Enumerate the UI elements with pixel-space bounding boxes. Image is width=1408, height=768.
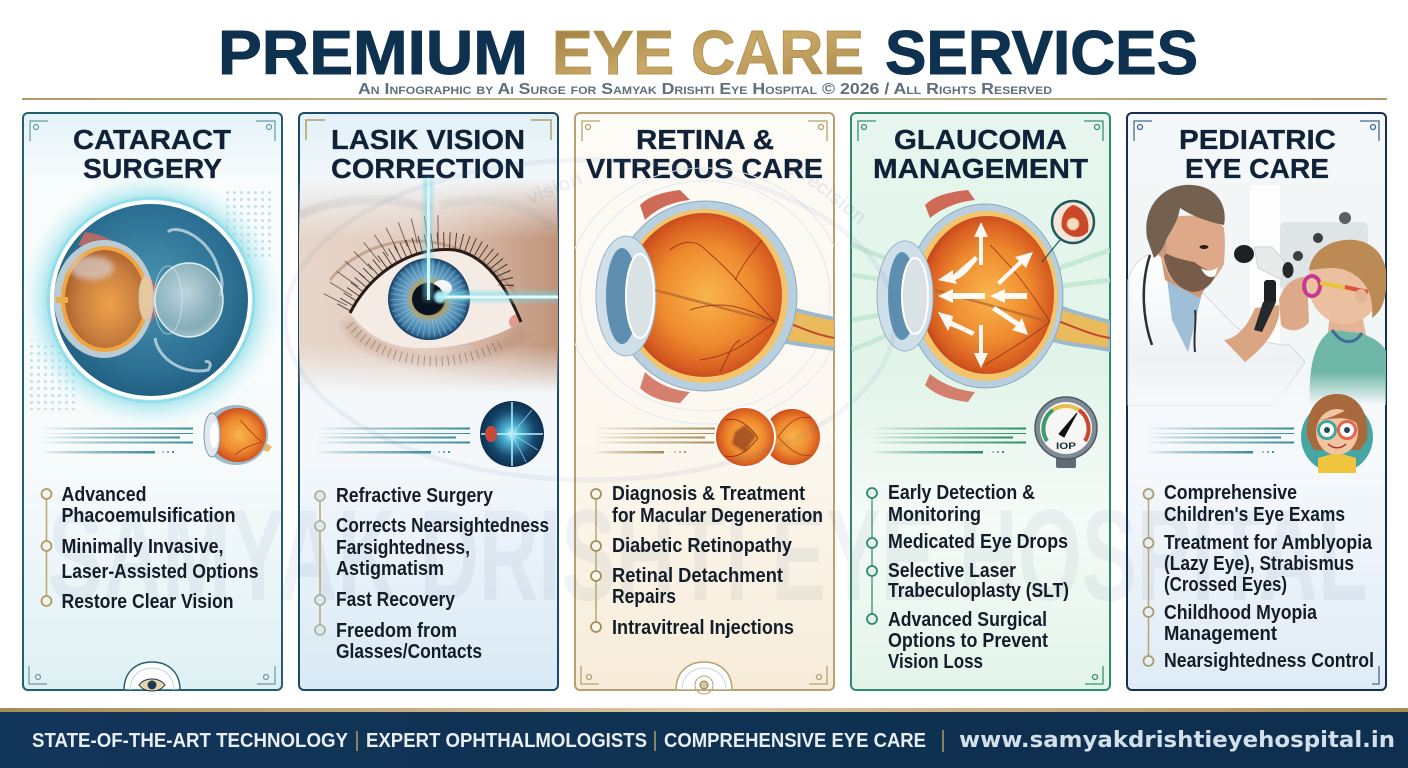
panel: cataract surgery bbox=[21, 113, 282, 691]
list: cataract bullets: Restore Clear Vision bbox=[62, 591, 234, 613]
heading: RETINA & bbox=[636, 124, 774, 155]
icon: IOP gauge: IOP bbox=[1056, 441, 1076, 451]
emblem: eye arch bbox=[124, 662, 180, 691]
list: retina bullets: Repairs bbox=[612, 586, 676, 608]
list: retina bullets bbox=[591, 483, 823, 639]
list: glaucoma bullets: Options to Prevent bbox=[888, 630, 1048, 652]
panel: retina and vitreous care bbox=[565, 113, 845, 694]
list: retina bullets: Intravitreal Injections bbox=[612, 617, 794, 639]
list: glaucoma bullets: Trabeculoplasty (SLT) bbox=[888, 580, 1069, 602]
heading bbox=[1179, 124, 1336, 184]
list: pediatric bullets: Nearsightedness Control bbox=[1164, 650, 1374, 672]
list: pediatric bullets bbox=[1144, 482, 1374, 672]
panel: pediatric eye care bbox=[1127, 113, 1390, 690]
slit lamp instrument bbox=[1234, 245, 1294, 332]
list: glaucoma bullets: Selective Laser bbox=[888, 560, 1016, 582]
heading: PEDIATRIC bbox=[1179, 124, 1336, 155]
list: pediatric bullets: Children's Eye Exams bbox=[1164, 504, 1345, 526]
icon: small eye bbox=[204, 405, 272, 465]
dotted halftone bbox=[30, 190, 275, 410]
list: glaucoma bullets: Advanced Surgical bbox=[888, 609, 1047, 631]
doctor bbox=[1128, 185, 1309, 405]
website url: www.samyakdrishtieyehospital.in bbox=[959, 728, 1395, 753]
list: glaucoma bullets: Monitoring bbox=[888, 504, 981, 526]
title bbox=[218, 19, 1198, 88]
arrows: pressure bbox=[938, 222, 1033, 368]
list: retina bullets: Diabetic Retinopathy bbox=[612, 535, 793, 557]
illustration: eye cross-section with retina bbox=[565, 168, 845, 424]
footer taglines bbox=[32, 730, 926, 752]
list: glaucoma bullets: Vision Loss bbox=[888, 651, 983, 673]
heading bbox=[73, 124, 231, 184]
list: lasik bullets: Farsightedness, bbox=[336, 537, 470, 559]
list: lasik bullets: Refractive Surgery bbox=[336, 485, 494, 507]
illustration: eye with intraocular lens bbox=[21, 172, 281, 428]
decorative lines bbox=[316, 428, 470, 454]
heading: EYE CARE bbox=[1185, 153, 1329, 184]
list: cataract bullets: Laser-Assisted Options bbox=[62, 561, 258, 583]
child bbox=[1304, 240, 1390, 405]
list: glaucoma bullets bbox=[867, 482, 1069, 673]
list: lasik bullets: Glasses/Contacts bbox=[336, 641, 482, 663]
list: lasik bullets: Fast Recovery bbox=[336, 589, 456, 611]
heading: CATARACT bbox=[73, 124, 231, 155]
list: pediatric bullets: (Lazy Eye), Strabismus bbox=[1164, 553, 1354, 575]
decorative lines bbox=[1146, 428, 1294, 454]
list: lasik bullets: Corrects Nearsightedness bbox=[336, 515, 549, 537]
list: glaucoma bullets: Early Detection & bbox=[888, 482, 1035, 504]
corner ornaments bbox=[29, 121, 275, 684]
title: PREMIUM bbox=[218, 19, 528, 88]
icon: IOP gauge bbox=[1035, 397, 1097, 468]
footer taglines: STATE-OF-THE-ART TECHNOLOGY bbox=[32, 730, 349, 752]
footer taglines: EXPERT OPHTHALMOLOGISTS bbox=[366, 730, 647, 752]
heading: GLAUCOMA bbox=[894, 124, 1067, 155]
list: lasik bullets bbox=[315, 485, 549, 663]
emblem: target arch bbox=[676, 662, 732, 694]
callout: optic nerve inset bbox=[1042, 201, 1094, 262]
list: pediatric bullets: Childhood Myopia bbox=[1164, 602, 1318, 624]
illustration: eye with pressure arrows bbox=[852, 190, 1110, 402]
list: cataract bullets: Minimally Invasive, bbox=[62, 536, 224, 558]
list: pediatric bullets: Treatment for Amblyopia bbox=[1164, 532, 1373, 554]
footer banner bbox=[0, 708, 1408, 768]
heading bbox=[586, 124, 823, 184]
heading: SURGERY bbox=[83, 153, 222, 184]
decorative lines bbox=[40, 428, 193, 454]
title: SERVICES bbox=[885, 19, 1198, 88]
subtitle: An Infographic by Ai Surge for Samyak Drishti Eye Hospital © 2026 / All Rights Reserved bbox=[358, 81, 1052, 98]
corner ornaments bbox=[581, 121, 827, 684]
list: retina bullets: Diagnosis & Treatment bbox=[612, 483, 805, 505]
list: glaucoma bullets: Medicated Eye Drops bbox=[888, 531, 1068, 553]
list: pediatric bullets: Management bbox=[1164, 623, 1277, 645]
illustration: laser eye close-up bbox=[299, 178, 558, 393]
list: pediatric bullets: Comprehensive bbox=[1164, 482, 1297, 504]
list: cataract bullets: Phacoemulsification bbox=[62, 505, 236, 527]
heading bbox=[331, 124, 525, 184]
heading bbox=[873, 124, 1088, 184]
watermark: hospital name and ring: vision bbox=[524, 168, 585, 210]
list: retina bullets: Retinal Detachment bbox=[612, 565, 783, 587]
list: cataract bullets: Advanced bbox=[62, 484, 146, 506]
watermark: hospital name and ring: precision bbox=[787, 157, 871, 229]
heading: LASIK VISION bbox=[331, 124, 525, 155]
illustration: doctor examining child bbox=[1128, 182, 1390, 405]
panel: glaucoma management bbox=[851, 113, 1110, 690]
heading: MANAGEMENT bbox=[873, 153, 1088, 184]
watermark: hospital name and ring bbox=[48, 157, 1368, 628]
decorative lines bbox=[870, 428, 1026, 454]
heading: CORRECTION bbox=[331, 153, 525, 184]
icon: retina fundus pair bbox=[715, 407, 820, 467]
list: pediatric bullets: (Crossed Eyes) bbox=[1164, 574, 1287, 596]
footer taglines: COMPREHENSIVE EYE CARE bbox=[664, 730, 926, 752]
icon: laser burst bbox=[480, 401, 544, 467]
list: lasik bullets: Freedom from bbox=[336, 620, 457, 642]
title: EYE CARE bbox=[552, 19, 864, 88]
list: retina bullets: for Macular Degeneration bbox=[612, 505, 823, 527]
decorative lines bbox=[593, 428, 715, 454]
corner ornaments bbox=[858, 121, 1103, 684]
panel: lasik vision correction bbox=[299, 113, 558, 690]
photo fade bbox=[1128, 372, 1385, 405]
corner ornaments bbox=[1134, 121, 1379, 684]
icon: girl with glasses bbox=[1301, 394, 1373, 473]
list: cataract bullets bbox=[42, 484, 258, 613]
corner ornaments bbox=[306, 120, 551, 140]
heading: VITREOUS CARE bbox=[586, 153, 823, 184]
list: lasik bullets: Astigmatism bbox=[336, 558, 444, 580]
